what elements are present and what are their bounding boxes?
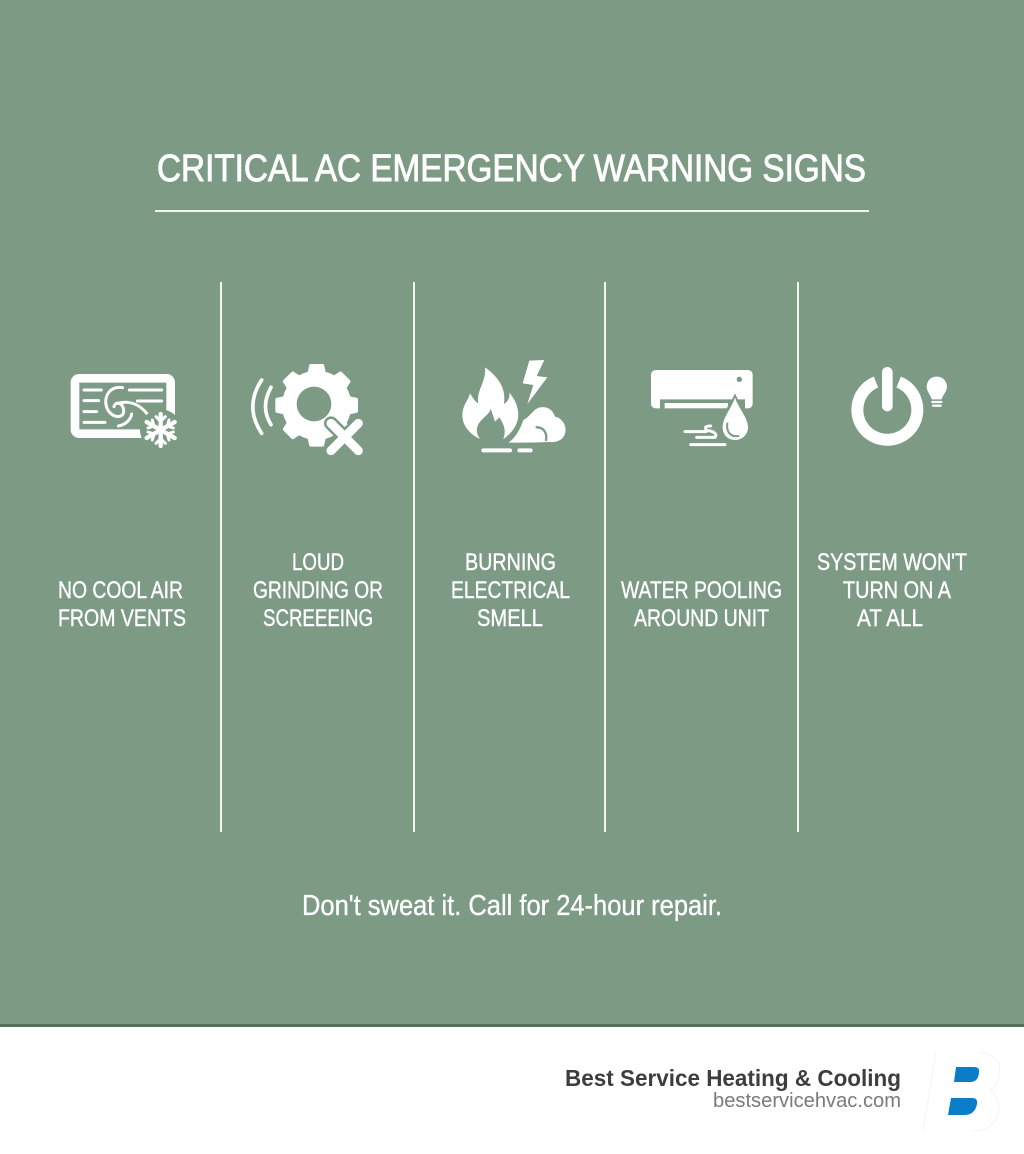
label: burning smell <box>451 549 570 632</box>
label: no cool air: NO COOL AIR <box>58 577 183 604</box>
label: burning smell: SMELL <box>477 605 543 632</box>
footer website: bestservicehvac.com <box>713 1090 901 1112</box>
label: water pooling: AROUND UNIT <box>634 605 769 632</box>
label: loud grinding: GRINDING OR <box>253 577 383 604</box>
icon: gear with sound waves and X <box>253 364 358 451</box>
label: no cool air: FROM VENTS <box>58 605 186 632</box>
icon: air vent with swirl and snowflake <box>75 378 181 451</box>
label: loud grinding: LOUD <box>292 549 344 576</box>
footer company name: Best Service Heating & Cooling <box>565 1065 901 1091</box>
icon: wall AC unit with water drop <box>651 370 753 445</box>
label: system won't turn on: TURN ON A <box>843 577 951 604</box>
label: system won't turn on: SYSTEM WON'T <box>817 549 967 576</box>
label: no cool air <box>58 577 186 632</box>
label: loud grinding: SCREEEING <box>263 605 373 632</box>
logo: blue B mark <box>923 1052 1000 1131</box>
label: water pooling: WATER POOLING <box>621 577 782 604</box>
title: CRITICAL AC EMERGENCY WARNING SIGNS <box>157 148 866 190</box>
label: loud grinding <box>253 549 383 632</box>
call to action: Don't sweat it. Call for 24-hour repair. <box>302 890 722 922</box>
label: system won't turn on <box>817 549 967 632</box>
label: burning smell: BURNING <box>465 549 556 576</box>
label: water pooling <box>621 577 782 632</box>
label: system won't turn on: AT ALL <box>857 605 923 632</box>
label: burning smell: ELECTRICAL <box>451 577 570 604</box>
icon: power symbol and light bulb <box>857 372 947 440</box>
footer band <box>0 1024 1024 1154</box>
icon: flame, lightning bolt and smoke <box>462 360 566 450</box>
